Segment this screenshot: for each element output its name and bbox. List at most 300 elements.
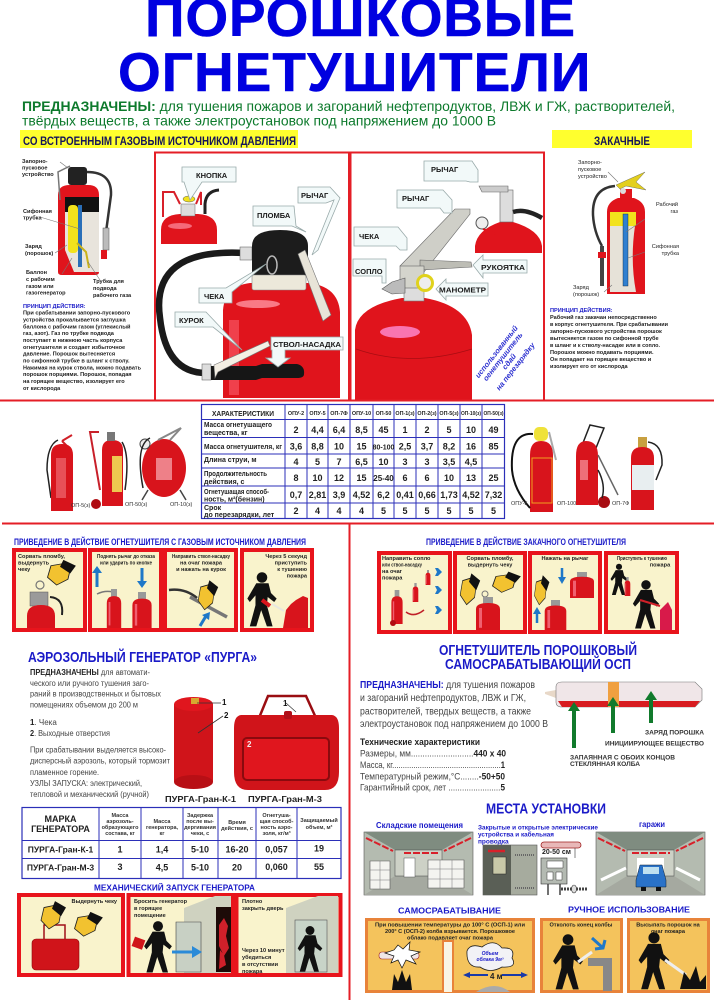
table body: Огнетушащая способ- (204, 488, 270, 496)
labels: installation places (376, 820, 665, 846)
table body: 5 (491, 506, 496, 516)
callouts: parts of the stored pressure extinguisher: РУКОЯТКА (481, 263, 526, 272)
icon: ОПУ-5 (512, 427, 556, 512)
table body: 8,8 (311, 442, 324, 452)
labels: cutaway parts: пусковое (22, 166, 48, 172)
text: operating principle, gas source: от кислорода (23, 386, 61, 392)
text: ОСП description (360, 680, 548, 730)
labels: installation places: Складские помещения (376, 821, 463, 830)
table body: 5 (446, 506, 452, 516)
table body: 3 (424, 457, 430, 467)
step 3: Через 10 минут (242, 948, 285, 954)
slanted note: recharge: огнетушитель (481, 330, 525, 383)
table body: 10 (378, 457, 389, 467)
text: Purga description: ПРЕДНАЗНАЧЕНЫ для автомати- (30, 668, 150, 677)
text: operating principle, gas source: давление. Порошок вытесняется (23, 352, 115, 358)
table body: Срок (204, 505, 222, 512)
table body: 6,5 (355, 457, 368, 467)
labels: stored cutaway parts: трубка (662, 251, 680, 257)
labels: stored cutaway parts (573, 160, 680, 298)
table header row: ОП-1(з) (395, 411, 415, 417)
labels: right models (511, 501, 629, 507)
table body: 13 (466, 473, 476, 483)
table body: 2 (424, 425, 430, 435)
divider lines (0, 400, 714, 1000)
text: ОСП description: растворителей, твердых веществ, а также (360, 706, 531, 718)
section label: built-in gas source (20, 130, 298, 148)
table body: 7 (336, 457, 342, 467)
title (118, 0, 591, 103)
labels: cutaway parts: подвода (93, 286, 118, 292)
table body: 0,66 (418, 490, 436, 500)
text: ОСП description: ПРЕДНАЗНАЧЕНЫ: для тушения пожаров (360, 680, 535, 691)
heading: stored pressure activation: ПРИВЕДЕНИЕ В ДЕЙСТВИЕ ЗАКАЧНОГО ОГНЕТУШИТЕЛЯ (426, 536, 626, 547)
text: Purga description: дисперсный аэрозоль, который тормозит (30, 756, 170, 766)
callouts: parts of the stored pressure extinguisher: РЫЧАГ (431, 165, 459, 174)
panel: stored pressure extinguisher detail (350, 152, 544, 400)
table header row: ОП-10(з) (461, 411, 481, 417)
panel: self-activation: 200° С (ОСП-2) колба взрывается. Порошковое (385, 928, 515, 935)
table rows: 4,5 (156, 862, 168, 872)
table body: 5 (402, 506, 408, 516)
labels: right models: ОП-7Ф (612, 501, 629, 507)
heading: self-activation: САМОСРАБАТЫВАНИЕ (398, 906, 501, 916)
heading: installation places: МЕСТА УСТАНОВКИ (486, 800, 606, 818)
instruction strip: gas source activation (14, 550, 312, 630)
text: ОСП technical characteristics: Гарантийный срок, лет .......................5 (360, 782, 505, 792)
illustration: warehouse (364, 832, 473, 895)
step 3: Плотно (242, 899, 263, 905)
step 4 (242, 550, 312, 630)
purpose text: твёрдых веществ, а также электроустановок под напряжением до 1000 В (22, 112, 496, 128)
table rows: 1,4 (156, 844, 168, 854)
table body: 80-100 (373, 444, 395, 452)
text: operating principle, gas source (23, 302, 142, 392)
step 4: приступить (275, 560, 308, 566)
step 3 (236, 895, 340, 975)
step 3: Нажать на рычаг (542, 556, 589, 562)
table body: 3,9 (333, 490, 345, 500)
section label: stored pressure (552, 130, 692, 148)
step 4: Через 5 секунд (265, 554, 307, 560)
labels: cutaway parts (22, 159, 132, 299)
step 4 (606, 553, 677, 632)
step 3: в отсутствии (242, 962, 279, 968)
table body: 4 (336, 506, 342, 516)
text: ОСП technical characteristics (360, 737, 506, 792)
callouts: parts of the stored pressure extinguisher: РЫЧАГ (402, 194, 430, 203)
table body: 7,32 (485, 490, 502, 500)
table header row: ОП-50 (376, 411, 391, 417)
labels: ОСП tube: ЗАПАЯННАЯ С ОБОИХ КОНЦОВ (570, 754, 676, 762)
text: operating principle, stored pressure: Рабочий газ закачан непосредственно (550, 314, 657, 321)
text: Purga description: тепловой и механический (ручной) (30, 790, 149, 799)
table rows: 1 (117, 844, 123, 854)
text: operating principle, gas source: баллона с рабочим газом (углекислый (23, 323, 131, 330)
icon: Purga M-3 case (234, 696, 339, 790)
table body: 2,81 (309, 490, 326, 500)
text: Purga description: помещениях объемом до 200 м (30, 700, 138, 710)
text: operating principle, stored pressure: Он попадает на горящее вещество и (550, 357, 652, 363)
labels: ОСП tube (570, 730, 705, 768)
heading: self-activating extinguisher: САМОСРАБАТЫВАЮЩИЙ ОСП (445, 655, 631, 673)
callouts: parts of the stored pressure extinguisher (353, 161, 527, 300)
icon: big extinguisher with lever (355, 209, 472, 400)
step 1: на очаг (382, 569, 403, 575)
step 1: чеку (18, 567, 31, 573)
table header: Масса (112, 813, 129, 819)
step 2: Поднять рычаг до отказа (97, 554, 156, 560)
table body: Длина струи, м (204, 457, 257, 464)
table rows: 19 (314, 844, 324, 854)
illustration: electrical cabinets: 20-50 см (542, 849, 571, 856)
table header: после вы- (186, 819, 214, 825)
step 3: на очаг пожара (180, 560, 223, 566)
labels: Purga models (165, 794, 322, 804)
icon: Purga K-1 cylinder (174, 697, 229, 789)
labels: stored cutaway parts: газ (670, 209, 678, 215)
table rows: 5-10 (191, 844, 209, 854)
table rows: 5-10 (191, 862, 209, 872)
text: Purga description: раний в производственных и бытовых (30, 690, 161, 698)
table body: 0,41 (396, 490, 414, 500)
section label: stored pressure: ЗАКАЧНЫЕ (594, 134, 650, 148)
step 2: в горящее (134, 906, 162, 912)
table header: состава, кг (105, 831, 136, 837)
callouts: parts of the stored pressure extinguisher: СОПЛО (355, 267, 383, 276)
labels: cutaway parts: газом или (26, 284, 54, 290)
step 2: Сорвать пломбу, (467, 555, 514, 562)
heading: manual use: РУЧНОЕ ИСПОЛЬЗОВАНИЕ (568, 904, 690, 914)
table body: 4,5 (465, 457, 477, 467)
instruction strip: mechanical start (19, 895, 340, 975)
table body: 3 (402, 457, 408, 467)
table header: Время (228, 820, 246, 826)
table body: 25-40 (373, 474, 394, 483)
text: ОСП description: электроустановок под напряжением до 1000 В (360, 719, 548, 730)
labels: stored cutaway parts: Рабочий (656, 201, 678, 208)
labels: left models (71, 502, 193, 509)
table body: вещества, кг (204, 430, 248, 437)
table rows: 3 (117, 862, 123, 872)
text: Purga description: ческого или ручного тушения заго- (30, 679, 149, 688)
step 3: и нажать на курок (176, 567, 226, 573)
table header row: ОП-50(з) (484, 411, 504, 417)
table header: золя, кг/м³ (262, 830, 291, 837)
table header: МАРКА (44, 814, 77, 824)
table body: 2 (293, 425, 299, 435)
table header: кг (159, 831, 165, 837)
labels: ОСП tube: СТЕКЛЯННАЯ КОЛБА (570, 761, 641, 768)
icon: stored cutaway extinguisher (593, 172, 646, 294)
panel: self-activation: Объем (482, 950, 499, 957)
table body (204, 422, 502, 519)
step 3 (530, 553, 600, 632)
labels: installation places: проводка (478, 838, 509, 846)
step 2 (128, 895, 232, 975)
labels: cutaway parts: (порошок) (25, 251, 53, 257)
step 1: Выдернуть чеку (72, 899, 118, 905)
table body: Масса огнетушителя, кг (204, 444, 282, 451)
text: operating principle, gas source: устройства прокалывается заглушка (23, 316, 127, 323)
extinguisher row: right models (511, 425, 662, 512)
table header row: ОПУ-5 (309, 411, 326, 417)
labels: right models: ОП-100 (557, 501, 576, 507)
arrows: tube parts (568, 691, 657, 748)
illustration: electrical cabinets (483, 842, 588, 895)
text: Purga description (30, 668, 170, 799)
table body: 10 (312, 473, 323, 483)
icon: Purga M-3 case: 1 (283, 699, 288, 708)
callouts: parts of the gas source extinguisher: КНОПКА (196, 171, 228, 180)
table header: чеки, с (191, 831, 209, 837)
table rows: 55 (314, 862, 324, 872)
labels: cutaway parts: трубка (23, 214, 42, 222)
table body: Масса огнетушащего (204, 422, 272, 429)
labels: stored cutaway parts: (порошок) (573, 292, 599, 298)
text: Purga description: 1. Чека (30, 718, 57, 727)
text: operating principle, stored pressure: ПРИНЦИП ДЕЙСТВИЯ: (550, 306, 613, 314)
text: operating principle, stored pressure (550, 306, 669, 370)
step 1: Сорвать пломбу, (18, 553, 65, 560)
section label: built-in gas source: СО ВСТРОЕННЫМ ГАЗОВЫМ ИСТОЧНИКОМ ДАВЛЕНИЯ (23, 134, 296, 148)
step 2: или ударить по кнопке (100, 560, 152, 566)
step 1 (14, 550, 85, 630)
table body: до перезарядки, лет (204, 512, 275, 519)
table body: 4,52 (462, 490, 480, 500)
table body: 3,7 (421, 442, 433, 452)
panel: scatter powder: Высыпать порошок на (636, 922, 701, 928)
step 1: выдернуть (18, 560, 50, 566)
icon: Purga K-1 cylinder: 2 (224, 711, 229, 720)
table body: 4,4 (311, 425, 324, 435)
slanted note: recharge: использованный (473, 323, 520, 380)
table body: 4,52 (353, 490, 370, 500)
table body: 6,2 (377, 490, 390, 500)
icon: ОП-50 (90, 432, 127, 509)
table header row: ОП-5(з) (439, 411, 459, 417)
panel: self-activation (366, 920, 534, 992)
panel: break off tube (542, 920, 622, 992)
table rows: 20 (232, 862, 242, 872)
step 3 (165, 550, 236, 630)
labels: cutaway parts: с рабочим (26, 276, 55, 283)
instruction strip: stored pressure activation (379, 553, 677, 632)
panel: self-activation: облака 9м³ (477, 956, 504, 963)
table header: действия, с (221, 825, 253, 832)
panel: scatter powder (628, 920, 708, 992)
table header row: ОПУ-10 (352, 411, 371, 417)
labels: ОСП tube: ЗАРЯД ПОРОШКА (645, 730, 705, 736)
heading: gas source activation: ПРИВЕДЕНИЕ В ДЕЙСТВИЕ ОГНЕТУШИТЕЛЯ С ГАЗОВЫМ ИСТОЧНИКОМ ДАВЛЕНИЯ (14, 536, 306, 547)
step 4: пожара (650, 562, 671, 568)
table rows (27, 844, 324, 872)
table body: 3,5 (443, 457, 455, 467)
step 3: пожара (242, 969, 263, 975)
table header: образующего (102, 824, 139, 831)
table header: Огнетуша- (262, 813, 291, 819)
icon: ОП-7Ф (631, 437, 662, 510)
icon: ОП-100 (576, 425, 618, 508)
labels: cutaway parts: Сифонная (23, 208, 52, 215)
table body: 5 (424, 506, 430, 516)
table body: 4 (359, 506, 364, 516)
labels: cutaway parts: газогенератор (26, 290, 66, 296)
heading: Purga generator: АЭРОЗОЛЬНЫЙ ГЕНЕРАТОР «ПУРГА» (28, 648, 257, 666)
table body: 0,7 (290, 490, 302, 500)
labels: ОСП tube: ИНИЦИИРУЮЩЕЕ ВЕЩЕСТВО (605, 740, 704, 748)
labels: cutaway parts: Запорно- (22, 159, 48, 165)
step 4: Приступить к тушению (617, 556, 667, 562)
table body: действия, с (204, 478, 245, 486)
table body: 10 (466, 425, 476, 435)
text: ОСП technical characteristics: Размеры, мм...........................440 х 40 (360, 748, 506, 758)
table body: 2 (293, 506, 299, 516)
callouts: parts of the gas source extinguisher: ПЛОМБА (257, 211, 291, 220)
illustration: garage (596, 832, 705, 895)
table body: 8 (293, 473, 299, 483)
callouts: parts of the stored pressure extinguisher: МАНОМЕТР (439, 286, 486, 294)
table header row: ОП-7Ф (330, 411, 348, 417)
table header: аэрозоль- (106, 819, 134, 825)
slanted note: recharge: на перезарядку (494, 340, 537, 392)
labels: Purga models: ПУРГА-Гран-К-1 (165, 794, 236, 804)
table body: 5 (315, 457, 320, 467)
text: operating principle, gas source: порошок порциями. Порошок, попадая (23, 372, 132, 378)
labels: stored cutaway parts: Заряд (573, 285, 590, 291)
step 1 (19, 895, 123, 975)
table body: 6,4 (333, 425, 345, 435)
slanted note: recharge: сдай (500, 352, 518, 371)
icon: Purga K-1 cylinder: 1 (222, 698, 227, 707)
purpose text: ПРЕДНАЗНАЧЕНЫ: для тушения пожаров и загораний нефтепродуктов, ЛВЖ и ГЖ, растворителей, (22, 98, 675, 114)
callouts: parts of the gas source extinguisher: ЧЕКА (204, 292, 225, 301)
purpose text (22, 98, 675, 128)
table rows: 16-20 (225, 844, 249, 854)
table body: 1 (402, 425, 408, 435)
text: ОСП description: и загораний нефтепродуктов, ЛВЖ и ГЖ, (360, 692, 526, 704)
labels: installation places: гаражи (639, 820, 665, 829)
text: operating principle, stored pressure: вытесняется газом по сифонной трубе (550, 335, 659, 342)
table body: 85 (488, 442, 499, 452)
text: operating principle, stored pressure: запорно-пускового устройства порошок (550, 328, 662, 335)
table header: щая способ- (260, 818, 294, 825)
panel: gas source extinguisher detail (155, 152, 349, 400)
panel: self-activation: 4 м (490, 972, 503, 981)
labels: cutaway parts: устройство (22, 171, 54, 178)
text: Purga description: пламенное горение. (30, 768, 99, 777)
table header: Масса (154, 819, 171, 825)
labels: cutaway parts: рабочего газа (93, 292, 132, 299)
labels: cutaway parts: Трубка для (93, 278, 124, 285)
text: ОСП technical characteristics: Температурный режим,°С........-50+50 (360, 772, 505, 782)
table header: Задержка (187, 813, 214, 819)
step 2: помещение (134, 913, 166, 919)
callouts: parts of the gas source extinguisher: РЫЧАГ (301, 191, 329, 200)
panel: self-activation: облако подавляет очаг пожара (407, 934, 494, 942)
icon: ОП-5 (47, 435, 73, 511)
table body: 5 (381, 506, 386, 516)
labels: stored cutaway parts: пусковое (578, 167, 601, 173)
labels: cutaway parts: Баллон (26, 270, 47, 276)
table rows: ПУРГА-Гран-М-3 (27, 862, 94, 872)
text: operating principle, stored pressure: в корпус огнетушителя. При срабатывании (550, 321, 669, 328)
table body: 12 (334, 473, 344, 483)
icon: small top view with button (161, 190, 219, 244)
callouts: parts of the stored pressure extinguisher: ЧЕКА (359, 232, 380, 241)
table body: 4 (293, 457, 299, 467)
table body: 8,2 (443, 442, 455, 452)
labels: installation places: устройства и кабельная (478, 830, 554, 838)
table body: 25 (488, 473, 499, 483)
labels: left models: ОП-5(з) (71, 503, 90, 509)
text: Purga description: При срабатывании выделяется высоко- (30, 746, 166, 754)
text: operating principle, gas source: ПРИНЦИП ДЕЙСТВИЯ: (23, 302, 86, 310)
table header row: ОП-2(з) (417, 411, 437, 417)
table header row: ХАРАКТЕРИСТИКИ (212, 411, 274, 418)
table header row: ОПУ-2 (288, 411, 304, 417)
step 2: выдернуть чеку (468, 562, 513, 568)
icon: cutaway extinguisher (58, 166, 111, 275)
icon: ОСП tube (545, 682, 702, 748)
labels: cutaway parts: Заряд (25, 244, 42, 250)
table rows: 0,057 (265, 844, 288, 854)
panel: self-activation: При повышении температуры до 100° С (ОСП-1) или (375, 922, 526, 928)
table rows: ПУРГА-Гран-К-1 (28, 844, 93, 854)
text: operating principle, gas source: При срабатывании запорно-пускового (23, 310, 131, 316)
table rows: 0,060 (265, 862, 288, 872)
table body: 3,6 (290, 442, 302, 452)
labels: stored cutaway parts: Сифонная (652, 244, 679, 250)
table header (31, 813, 338, 837)
extinguisher row: left models (47, 428, 193, 511)
step 3: Направить ствол-насадку (172, 554, 231, 560)
text: Purga description: 2. Выходные отверстия (30, 729, 110, 738)
panel: break off tube: Отколоть конец колбы (550, 922, 613, 928)
table header: объем, м³ (306, 824, 333, 831)
step 1: Направить сопло (382, 556, 431, 562)
table header: генератора, (146, 825, 179, 831)
table header: дергивания (184, 825, 216, 831)
text: operating principle, stored pressure: изолирует его от кислорода (550, 364, 629, 370)
text: operating principle, gas source: на горящее вещество, изолирует его (23, 379, 125, 385)
step 3: убедиться (242, 954, 271, 961)
table body: 15 (356, 442, 367, 452)
panel: scatter powder: очаг пожара (651, 929, 686, 935)
table body: 1,73 (440, 490, 458, 500)
text: ОСП technical characteristics: Технические характеристики (360, 737, 480, 747)
text: operating principle, gas source: поступает в нижнюю часть корпуса (23, 338, 123, 344)
table body: 6 (424, 473, 430, 483)
labels: Purga models: ПУРГА-Гран-М-3 (248, 794, 322, 804)
step 2 (455, 553, 525, 632)
labels: installation places: Закрытые и открытые электрические (478, 824, 598, 832)
text: operating principle, gas source: газ, азот). Газ по трубке подвода (23, 330, 115, 337)
table body: Продолжительность (204, 471, 268, 478)
text: operating principle, gas source: огнетушителя и создает избыточное (23, 344, 125, 351)
step 1: или ствол-насадку (382, 562, 423, 568)
text: operating principle, gas source: по сифонной трубке в шланг к стволу. (23, 358, 130, 364)
table body: 4 (315, 506, 320, 516)
table header row (212, 411, 504, 418)
step 1: пожара (382, 576, 403, 582)
step 3: закрыть дверь (242, 906, 284, 912)
step 1 (379, 553, 450, 632)
table header: ность аэро- (261, 825, 293, 831)
icon: small extinguisher with gauge (475, 186, 542, 253)
panel: cutaway with gas source (22, 159, 132, 299)
callouts: parts of the gas source extinguisher (175, 167, 343, 367)
